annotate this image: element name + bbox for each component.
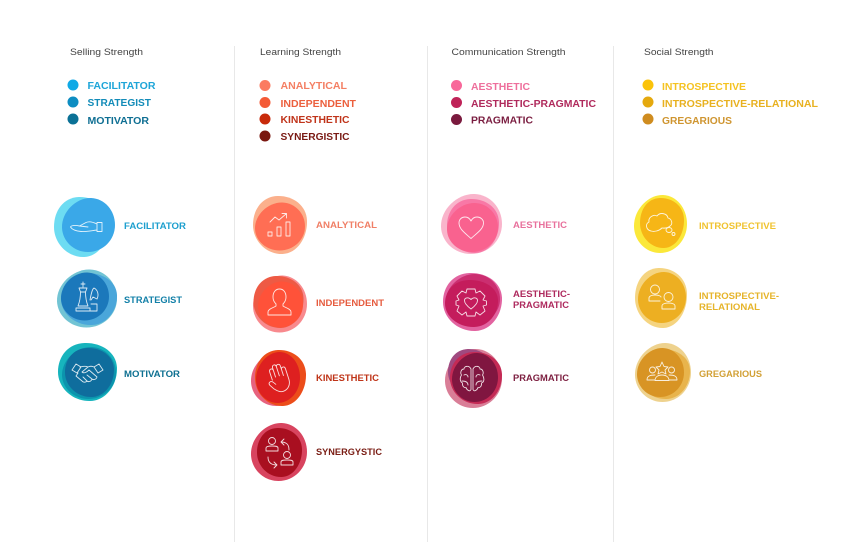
legend: social styles: INTROSPECTIVE-RELATIONAL bbox=[662, 99, 818, 110]
legend: selling styles bbox=[68, 80, 156, 127]
legend: learning styles: INDEPENDENT bbox=[280, 99, 357, 110]
panel: learning strength bbox=[251, 47, 384, 481]
legend: communication styles: AESTHETIC bbox=[471, 82, 531, 93]
panel: social strength bbox=[634, 47, 818, 402]
badge: kinesthetic: KINESTHETIC bbox=[316, 373, 379, 384]
badge: pragmatic bbox=[445, 349, 569, 408]
legend: learning styles: KINESTHETIC bbox=[280, 115, 350, 126]
badge: strategist: STRATEGIST bbox=[124, 295, 182, 306]
badge: facilitator: FACILITATOR bbox=[124, 221, 186, 232]
badge: analytical bbox=[253, 196, 377, 254]
badge: synergystic bbox=[251, 423, 382, 481]
legend: social styles: INTROSPECTIVE bbox=[662, 82, 746, 93]
badge: synergystic: SYNERGYSTIC bbox=[316, 447, 382, 458]
legend: selling styles: FACILITATOR bbox=[88, 81, 156, 92]
badge: introspective-relational: RELATIONAL bbox=[699, 302, 760, 313]
badge: independent: INDEPENDENT bbox=[316, 298, 384, 309]
heading: selling strength: Selling Strength bbox=[70, 47, 143, 57]
badge: aesthetic-pragmatic: PRAGMATIC bbox=[513, 300, 569, 311]
legend: communication styles: AESTHETIC-PRAGMATIC bbox=[471, 99, 597, 110]
badge: motivator: MOTIVATOR bbox=[124, 369, 180, 380]
badge: gregarious: GREGARIOUS bbox=[699, 369, 763, 380]
badge: analytical: ANALYTICAL bbox=[316, 220, 377, 231]
legend: social styles bbox=[642, 80, 818, 127]
badge: introspective bbox=[634, 195, 777, 253]
badge: aesthetic-pragmatic: AESTHETIC- bbox=[513, 289, 570, 300]
legend: social styles: GREGARIOUS bbox=[662, 116, 732, 127]
badge: kinesthetic bbox=[251, 350, 379, 406]
legend: selling styles: STRATEGIST bbox=[88, 98, 152, 109]
heading: communication strength: Communication Strength bbox=[452, 47, 566, 57]
legend: communication styles bbox=[451, 80, 597, 126]
badge: strategist bbox=[57, 269, 182, 328]
legend: selling styles: MOTIVATOR bbox=[88, 116, 150, 127]
badge: gregarious bbox=[635, 343, 763, 402]
badge: introspective: INTROSPECTIVE bbox=[699, 221, 777, 232]
heading: learning strength: Learning Strength bbox=[260, 47, 341, 57]
badge: aesthetic: AESTHETIC bbox=[513, 220, 567, 231]
legend: learning styles: SYNERGISTIC bbox=[280, 132, 350, 143]
legend: learning styles bbox=[260, 80, 357, 143]
badge: facilitator bbox=[54, 197, 186, 257]
legend: communication styles: PRAGMATIC bbox=[471, 116, 534, 126]
legend: learning styles: ANALYTICAL bbox=[280, 81, 347, 92]
badge: introspective-relational: INTROSPECTIVE- bbox=[699, 291, 779, 302]
badge: introspective-relational bbox=[635, 268, 779, 328]
badge: independent bbox=[253, 275, 384, 332]
panel: communication strength bbox=[441, 47, 597, 408]
badge: motivator bbox=[58, 343, 180, 401]
panel: selling strength bbox=[54, 47, 186, 401]
badge: pragmatic: PRAGMATIC bbox=[513, 373, 569, 384]
heading: social strength: Social Strength bbox=[644, 47, 714, 57]
badge: aesthetic-pragmatic bbox=[443, 273, 570, 331]
badge: aesthetic bbox=[441, 194, 567, 254]
